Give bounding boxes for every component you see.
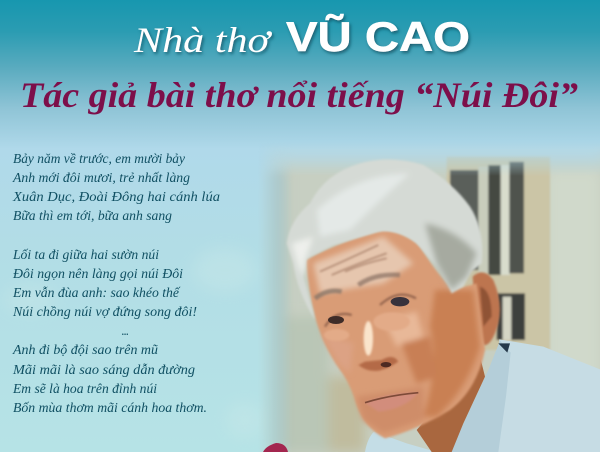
face shading bbox=[313, 237, 480, 433]
cropped red ornament at bottom edge bbox=[263, 443, 288, 452]
forehead wrinkles bbox=[315, 245, 400, 298]
stanza 1: Bữa thì em tới, bữa anh sang bbox=[13, 209, 172, 224]
stanza 1: Bảy năm về trước, em mười bảy bbox=[13, 152, 186, 167]
title name: VŨ CAO bbox=[286, 12, 470, 60]
eyes, nose and mouth bbox=[324, 295, 418, 412]
poem bbox=[12, 152, 220, 416]
stanza 3 bbox=[12, 343, 207, 416]
white hair bbox=[287, 160, 482, 320]
stanza 3: Mãi mãi là sao sáng dẫn đường bbox=[12, 363, 195, 378]
shirt bbox=[365, 339, 600, 452]
stanza 2: Đôi ngọn nên làng gọi núi Đôi bbox=[12, 267, 183, 282]
neck bbox=[417, 357, 485, 452]
face bbox=[306, 230, 485, 438]
title prefix: Nhà thơ bbox=[133, 20, 272, 60]
stanza 2: Núi chồng núi vợ đứng song đôi! bbox=[12, 305, 197, 320]
stanza 2: Lối ta đi giữa hai sườn núi bbox=[12, 248, 159, 263]
title: Nhà thơ VŨ CAO bbox=[133, 12, 470, 60]
subtitle: Tác giả bài thơ nổi tiếng “Núi Đôi” bbox=[20, 75, 578, 115]
stanza 3: Em sẽ là hoa trên đỉnh núi bbox=[12, 382, 157, 397]
stanza 1 bbox=[12, 152, 220, 224]
stanza 3: Bốn mùa thơm mãi cánh hoa thơm. bbox=[13, 401, 207, 416]
decorative pale clouds bbox=[4, 248, 265, 438]
ellipsis: ... bbox=[122, 327, 129, 337]
stanza 3: Anh đi bộ đội sao trên mũ bbox=[12, 343, 158, 358]
stanza 1: Anh mới đôi mươi, trẻ nhất làng bbox=[12, 171, 190, 186]
stanza 2 bbox=[12, 248, 197, 320]
window frame bbox=[447, 157, 550, 350]
portrait figure bbox=[287, 160, 600, 452]
stanza 2: Em vẫn đùa anh: sao khéo thế bbox=[12, 286, 181, 301]
ear bbox=[473, 272, 500, 345]
photo background wall bbox=[264, 151, 600, 452]
stanza 1: Xuân Dục, Đoài Đông hai cánh lúa bbox=[12, 190, 220, 205]
